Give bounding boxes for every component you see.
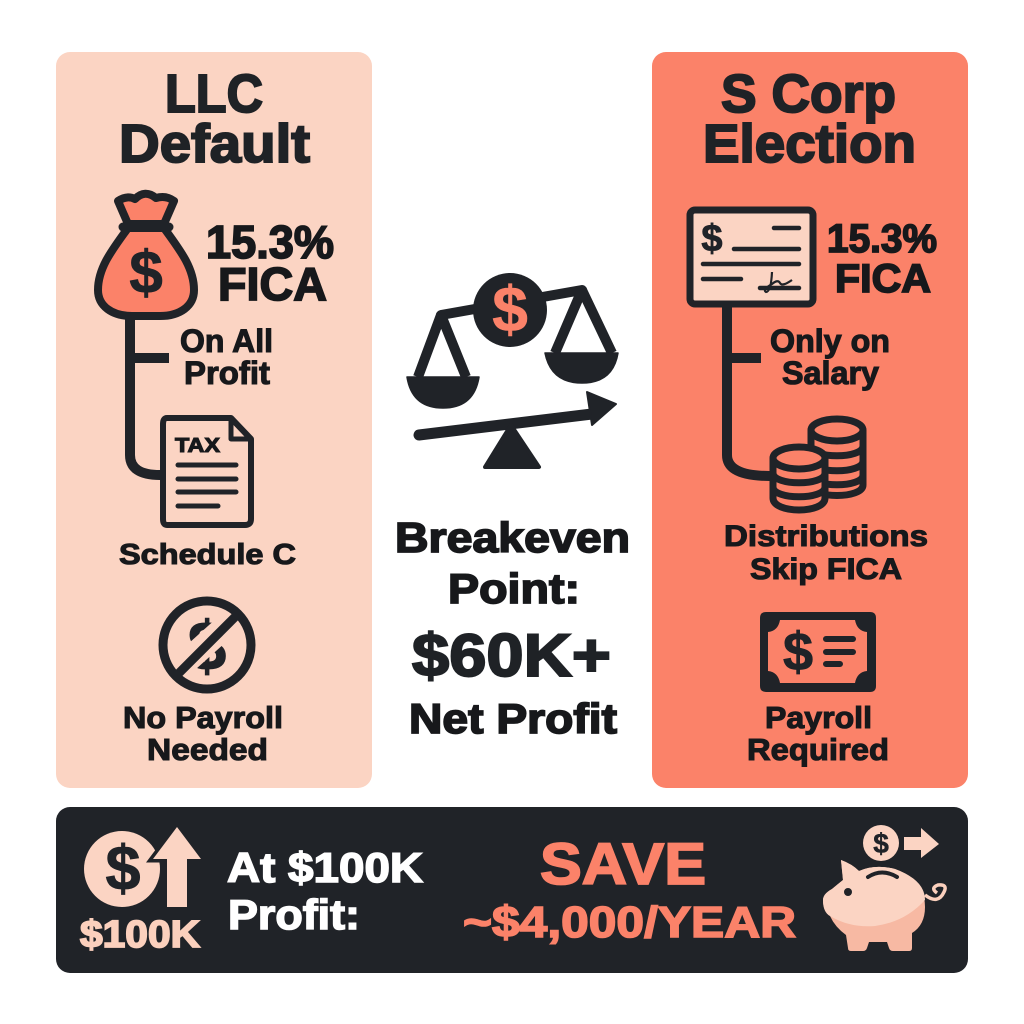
text: At $100K Profit: Profit: [228, 891, 360, 938]
icon: money bag [98, 194, 194, 316]
text: Only on Salary [770, 323, 890, 391]
icon: piggy bank: $ [873, 828, 889, 859]
icon: no dollar [163, 601, 251, 689]
icon: piggy bank [823, 825, 945, 951]
text: Only on Salary: Salary [782, 355, 879, 391]
text: No Payroll Needed: No Payroll [123, 700, 283, 735]
icon: paycheck: $ [701, 218, 723, 260]
text: 15.3% FICA [206, 216, 334, 310]
icon: money bag: $ [129, 239, 163, 306]
text: Distributions Skip FICA: Distributions [724, 520, 928, 553]
text: save amount [463, 832, 796, 947]
heading: S Corp Election: Election [703, 114, 916, 174]
icon: balance scale with arrow: $ [492, 273, 528, 345]
text: Payroll Required: Required [747, 732, 889, 767]
heading: S Corp Election: S Corp [721, 64, 896, 124]
text: Payroll Required: Payroll [765, 700, 872, 735]
panel: LLC Default [56, 52, 372, 788]
text: On All Profit [180, 323, 273, 391]
connector line [727, 305, 770, 476]
text: No Payroll Needed: Needed [147, 732, 268, 767]
text: breakeven point: Breakeven [395, 514, 630, 561]
connector line [130, 314, 169, 475]
text: 15.3% FICA: 15.3% [827, 217, 937, 261]
icon: no dollar: $ [188, 607, 226, 685]
text: save amount: ~$4,000/YEAR [463, 898, 796, 947]
icon: payroll bill [760, 612, 876, 692]
text: save amount: SAVE [540, 832, 706, 897]
text: On All Profit: On All [180, 323, 273, 359]
heading: S Corp Election [703, 64, 916, 174]
icon: paycheck [690, 210, 813, 304]
panel: savings bar [56, 807, 968, 973]
icon: coin stacks [773, 419, 863, 510]
panel: S Corp Election [652, 52, 968, 788]
text: Only on Salary: Only on [770, 323, 890, 359]
heading: LLC Default: LLC [165, 64, 263, 124]
text: 15.3% FICA: FICA [835, 257, 931, 301]
text: Distributions Skip FICA: Skip FICA [750, 553, 902, 586]
icon: payroll bill: $ [783, 622, 813, 682]
text: Payroll Required [747, 700, 889, 767]
text: breakeven point: Net Profit [409, 695, 617, 742]
text: At $100K Profit: At $100K [227, 844, 423, 891]
text: Schedule C: Schedule C [119, 539, 296, 571]
text: No Payroll Needed [123, 700, 283, 767]
text: 15.3% FICA: 15.3% [206, 216, 334, 268]
icon: balance scale with arrow [407, 273, 618, 467]
text: 15.3% FICA [827, 217, 937, 301]
text: breakeven point: $60K+ [412, 622, 611, 689]
icon: dollar coin with up arrow: $ [105, 834, 141, 904]
icon: dollar coin with up arrow [84, 827, 201, 907]
text: Distributions Skip FICA [724, 520, 928, 586]
text: On All Profit: Profit [184, 355, 270, 391]
icon: tax document [163, 418, 251, 525]
icon: tax document: TAX [175, 435, 221, 457]
text: breakeven point: Point: [448, 565, 580, 612]
text: At $100K Profit [227, 844, 423, 938]
text: 15.3% FICA: FICA [218, 258, 327, 310]
text: $100K: $100K [80, 914, 201, 956]
text: breakeven point [395, 514, 630, 742]
heading: LLC Default: Default [119, 114, 310, 174]
heading: LLC Default [119, 64, 310, 174]
